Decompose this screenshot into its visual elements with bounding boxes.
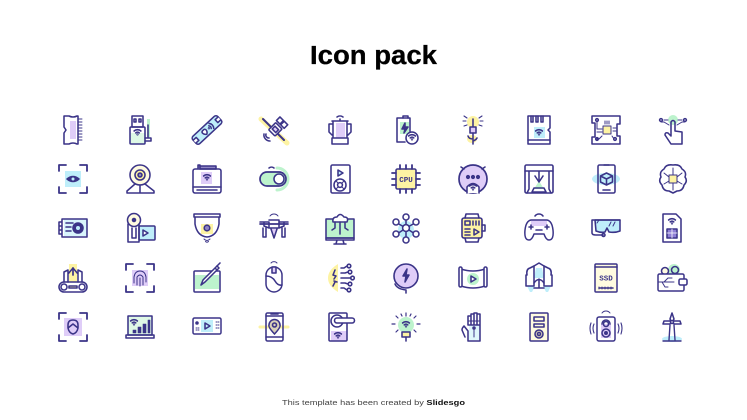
icon: smart switch — [260, 167, 288, 190]
icon: laptop signal chart — [126, 316, 154, 338]
icon: CPU chip: CPU — [399, 177, 413, 185]
icon: circuit board chip — [592, 116, 620, 144]
icon: game controller — [525, 214, 553, 240]
icon: flexible display — [459, 267, 487, 288]
icon: robotic hand — [462, 313, 480, 341]
icon: circuit head — [328, 264, 354, 292]
icon: fingerprint scan — [126, 264, 154, 292]
icon: AI brain — [660, 165, 686, 193]
icon: cloud monitor — [326, 214, 354, 244]
icon: smart speaker — [590, 311, 622, 341]
icon: smart glasses — [592, 220, 620, 236]
icon: robot vacuum — [459, 165, 487, 193]
icon: phone location — [260, 313, 288, 341]
icon: SIM card — [663, 214, 681, 242]
icon: security dome camera — [194, 214, 220, 242]
icon: wireless charger — [394, 264, 418, 293]
icon: smart door handle — [329, 313, 354, 341]
icon: RAM stick — [64, 116, 82, 144]
icon: smart light bulb with roots — [463, 116, 483, 144]
icon: webcam — [127, 165, 154, 193]
icon: drawing tablet — [194, 263, 220, 292]
icon: wifi router — [193, 165, 221, 193]
icon: drone — [260, 214, 288, 238]
icon: wifi bulb — [392, 313, 420, 341]
icon: molecule network — [393, 214, 419, 243]
icon: jet pack — [526, 263, 552, 292]
icon: USB wifi adapter — [130, 116, 151, 144]
icon: graphics card — [59, 219, 87, 237]
icon: digital wallet — [658, 264, 687, 291]
icon: phone with 3D cube — [592, 165, 620, 193]
icon: SD card — [528, 116, 550, 144]
icon: CPU chip — [392, 165, 420, 193]
icon grid — [59, 115, 687, 342]
icon: smart battery — [397, 116, 418, 144]
icon: conveyor robot arm — [59, 264, 87, 292]
icon: portable game console — [193, 318, 221, 334]
icon: wind turbine — [662, 313, 682, 342]
icon: 3D printer — [525, 165, 553, 193]
icon: smart mouse — [266, 262, 282, 292]
icon: face scan — [59, 313, 87, 341]
footer credit: This template has been created by Slidesgo — [282, 398, 465, 407]
icon: video camera — [128, 214, 155, 242]
icon: smart kettle — [329, 116, 351, 144]
icon: eye scan — [59, 165, 87, 193]
icon: desktop tower — [530, 313, 548, 341]
icon: SSD drive: SSD — [599, 276, 613, 284]
icon: SSD drive — [595, 264, 617, 292]
icon: touch finger network — [660, 115, 686, 144]
icon: smart band — [191, 115, 223, 145]
icon: music player — [331, 165, 350, 193]
icon: smart watch — [462, 214, 485, 242]
icon: satellite — [261, 117, 288, 143]
title: Icon pack — [310, 42, 438, 70]
